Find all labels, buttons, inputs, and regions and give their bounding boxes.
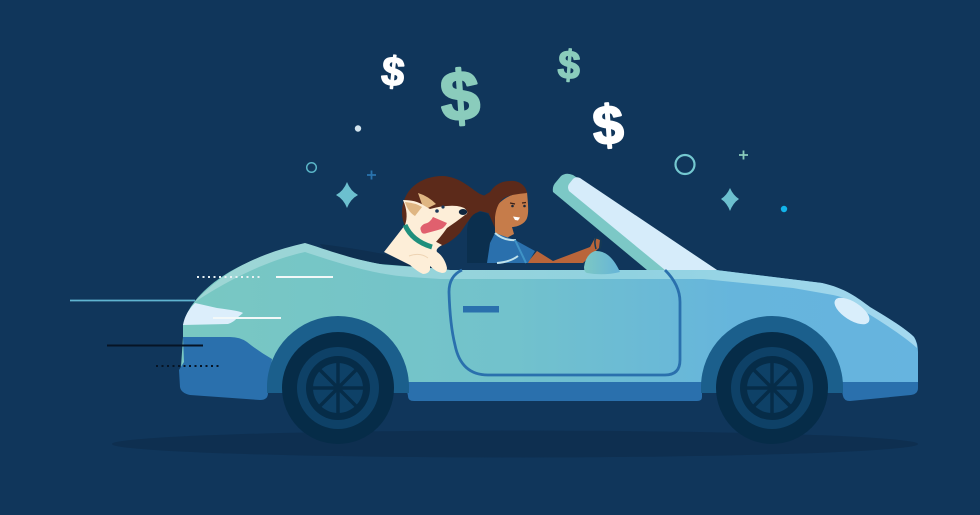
- rear light: [183, 303, 243, 325]
- mouth: [420, 217, 447, 234]
- collar: [405, 225, 432, 247]
- windshield: [553, 174, 717, 270]
- rear wheel: [267, 316, 409, 444]
- ear: [405, 202, 422, 216]
- car body: [180, 244, 918, 382]
- dollar signs: $: [379, 47, 407, 96]
- sill: [405, 382, 702, 401]
- body top highlight band: [195, 243, 917, 348]
- front bumper: [840, 382, 918, 401]
- driver: [467, 181, 601, 263]
- eyes and smile: [510, 202, 526, 204]
- seat: [467, 212, 496, 263]
- door handle: [463, 306, 499, 312]
- headlight: [830, 293, 874, 329]
- dog: [384, 193, 467, 274]
- eyes and nose: [435, 209, 439, 213]
- door outline: [449, 270, 680, 375]
- back ear: [418, 193, 436, 210]
- cockpit shade: [320, 244, 450, 272]
- paw crease: [409, 254, 428, 258]
- shirt: [487, 233, 535, 263]
- arm: [527, 238, 600, 263]
- flowing hair: [402, 176, 496, 247]
- body: [384, 225, 447, 274]
- rear bumper: [179, 337, 272, 400]
- head: [403, 200, 467, 245]
- speed lines: [70, 277, 333, 366]
- front wheel: [701, 316, 843, 444]
- steering wheel grip: [595, 237, 601, 249]
- dollar signs: $: [556, 43, 582, 88]
- dashboard dome: [584, 251, 620, 274]
- dollar signs: $: [591, 93, 625, 157]
- sparkles and decorative marks: [307, 125, 787, 212]
- dollar signs: $: [438, 56, 482, 136]
- neck and face: [495, 192, 528, 240]
- hair: [480, 181, 527, 228]
- ground shadow: [112, 430, 918, 458]
- dollar signs: [379, 43, 625, 157]
